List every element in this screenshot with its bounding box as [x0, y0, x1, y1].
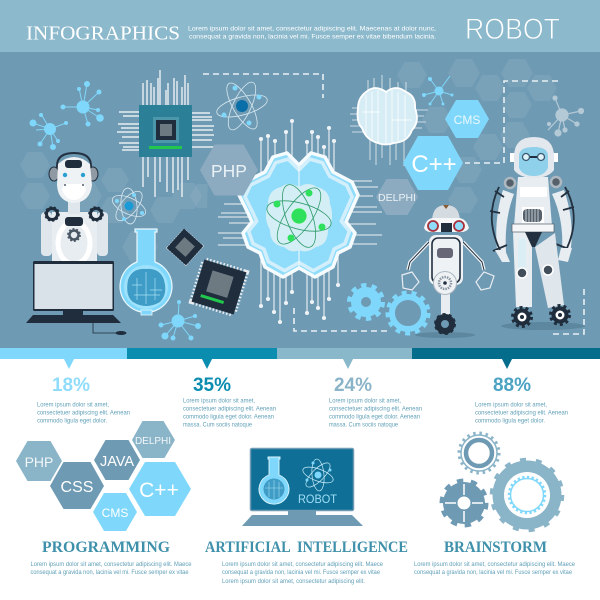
section: programming — [16, 421, 192, 576]
stat: 24%: 24% — [334, 375, 372, 396]
hexagon: DELPHI: DELPHI — [378, 192, 416, 204]
hexagon cluster: C++ — [139, 479, 179, 502]
header band — [0, 0, 600, 52]
headphones — [57, 153, 91, 170]
atom: blue left — [109, 187, 149, 225]
legs — [513, 232, 532, 307]
laptop flask — [259, 457, 289, 504]
brainstorm text — [414, 561, 575, 576]
robot arms — [41, 212, 52, 256]
molecule: upper right — [422, 76, 453, 105]
header text block: consequat a gravida non, lacinia vel mi. Fusce semper ex vitae bibendum lacinia. — [189, 34, 436, 40]
dashed connector lines — [203, 74, 584, 334]
head dome — [432, 205, 460, 222]
molecule: lower — [159, 300, 200, 340]
shoulder gears — [45, 207, 103, 221]
laptop label: ROBOT — [298, 494, 337, 506]
stat: 18% — [37, 375, 130, 424]
green atom — [264, 181, 334, 251]
stat: 35%: massa. Cum sociis natoque — [183, 422, 252, 428]
hexagon: C++ — [403, 136, 463, 190]
heading: brainstorm: BRAINSTORM — [444, 539, 547, 556]
stat: 35%: commodo ligula eget dolor. Aenean — [183, 414, 274, 420]
colour bars with pointers — [0, 348, 600, 369]
section: artificial intelligence — [205, 448, 408, 585]
gear: spoked — [442, 480, 486, 526]
stat: 18%: commodo ligula eget dolor. — [37, 418, 107, 424]
artificial intelligence text: Lorem ipsum dolor sit amet, consectetur adipiscing elit. — [222, 578, 365, 585]
robot: small wheeled — [402, 205, 494, 338]
shoulders — [505, 178, 515, 188]
programming text: Lorem ipsum dolor sit amet, consectetur adipiscing elit. Maece — [30, 561, 192, 568]
background hexagon pattern — [20, 59, 557, 263]
chest gear — [68, 229, 80, 241]
stat: 24%: commodo ligula eget dolor. Aenean — [329, 414, 420, 420]
hexagon: C++: C++ — [411, 151, 457, 178]
artificial intelligence text — [222, 561, 383, 585]
heading: artificial intelligence: ARTIFICIAL INTELLIGENCE — [205, 539, 408, 556]
programming text: consequat a gravida non, lacinia vel mi. Fusce semper ex vitae — [30, 569, 189, 576]
hexagon: DELPHI — [376, 179, 418, 215]
stat: 35%: Lorem ipsum dolor sit amet, — [183, 398, 255, 404]
stat: 24%: massa. Cum sociis natoque — [329, 422, 398, 428]
laptop atom — [301, 459, 335, 491]
arms — [496, 190, 514, 252]
hexagon cluster: CSS — [61, 479, 93, 496]
robot: tall silver — [490, 137, 585, 330]
hexagon cluster: JAVA — [100, 454, 134, 470]
microchip: small rotated — [167, 229, 203, 265]
stat: 35%: 35% — [193, 375, 231, 396]
gear: large with inner gear — [492, 460, 562, 530]
shadow — [415, 332, 475, 338]
hexagon: PHP: PHP — [211, 161, 247, 181]
stat: 88%: consectetuer adipiscing elit. Aenean — [475, 410, 568, 416]
brain circuit lines — [218, 120, 382, 324]
programming text — [30, 561, 192, 576]
belt — [512, 224, 554, 232]
hands — [495, 250, 510, 262]
hexagon cluster — [16, 421, 191, 531]
artificial intelligence text: consequat a gravida non, lacinia vel mi. Fusce semper ex vitae — [222, 569, 380, 576]
robot neck — [68, 200, 80, 214]
brain with green atom — [239, 153, 358, 277]
main illustration panel — [0, 52, 600, 348]
wheel — [438, 317, 452, 331]
stat: 18%: Lorem ipsum dolor sit amet, — [37, 402, 109, 408]
stat: 24% — [329, 375, 422, 428]
header text block — [188, 26, 436, 40]
hexagon cluster: DELPHI — [135, 436, 171, 447]
brainstorm text: consequat a gravida non, lacinia vel mi. Fusce semper ex vitae — [414, 569, 572, 576]
stat: 24%: Lorem ipsum dolor sit amet, — [329, 398, 401, 404]
robot body — [52, 212, 97, 262]
title: infographics: INFOGRAPHICS — [26, 22, 180, 44]
torso — [514, 177, 552, 226]
hexagon cluster: PHP — [25, 454, 53, 470]
section: brainstorm — [414, 433, 575, 576]
gear: light blue ring — [388, 292, 428, 334]
title: robot: ROBOT — [465, 13, 560, 46]
eye panel — [424, 218, 469, 232]
header text block: Lorem ipsum dolor sit amet, consectetur adipiscing elit. Maecenas at dolor nunc, — [188, 26, 436, 32]
atom: blue upper — [215, 79, 269, 133]
heading: programming: PROGRAMMING — [42, 539, 171, 556]
hexagon cluster: CMS — [102, 506, 128, 520]
microchip: large rotated — [192, 260, 246, 314]
laptop — [242, 448, 363, 526]
hexagon: CMS: CMS — [454, 113, 480, 127]
helmet — [510, 153, 515, 162]
leg — [441, 293, 450, 317]
stat: 88%: Lorem ipsum dolor sit amet, — [475, 402, 547, 408]
gear: top ring — [459, 433, 499, 473]
stat: 24%: consectetuer adipiscing elit. Aenean — [329, 406, 422, 412]
stat: 35%: consectetuer adipiscing elit. Aenean — [183, 406, 276, 412]
molecule: grey right — [548, 96, 584, 136]
molecule: left — [30, 114, 68, 150]
molecule: upper left — [61, 82, 103, 126]
stat: 35% — [183, 375, 276, 428]
stat: 88%: 88% — [493, 375, 531, 396]
gear: light blue small — [350, 286, 382, 318]
small circuit brain — [350, 75, 428, 166]
wheels — [516, 310, 528, 324]
arms and claws — [408, 242, 484, 270]
desktop computer — [26, 261, 126, 335]
stat: 18%: 18% — [52, 375, 90, 396]
robot with headphones at computer — [41, 153, 108, 264]
hexagon: CMS — [445, 100, 489, 138]
microchip: teal with circuit pins — [117, 70, 214, 197]
brainstorm text: Lorem ipsum dolor sit amet, consectetur adipiscing elit. Maece — [414, 561, 575, 568]
stat: 88%: commodo ligula eget dolor. — [475, 418, 545, 424]
artificial intelligence text: Lorem ipsum dolor sit amet, consectetur adipiscing elit. Maece — [222, 561, 383, 568]
stat: 88% — [475, 375, 568, 424]
hexagon: PHP — [200, 144, 258, 196]
flask with brain — [120, 229, 172, 315]
shadow — [501, 322, 585, 330]
stat: 18%: consectetuer adipiscing elit. Aenean — [37, 410, 130, 416]
body — [429, 235, 463, 285]
robot head — [57, 157, 92, 203]
